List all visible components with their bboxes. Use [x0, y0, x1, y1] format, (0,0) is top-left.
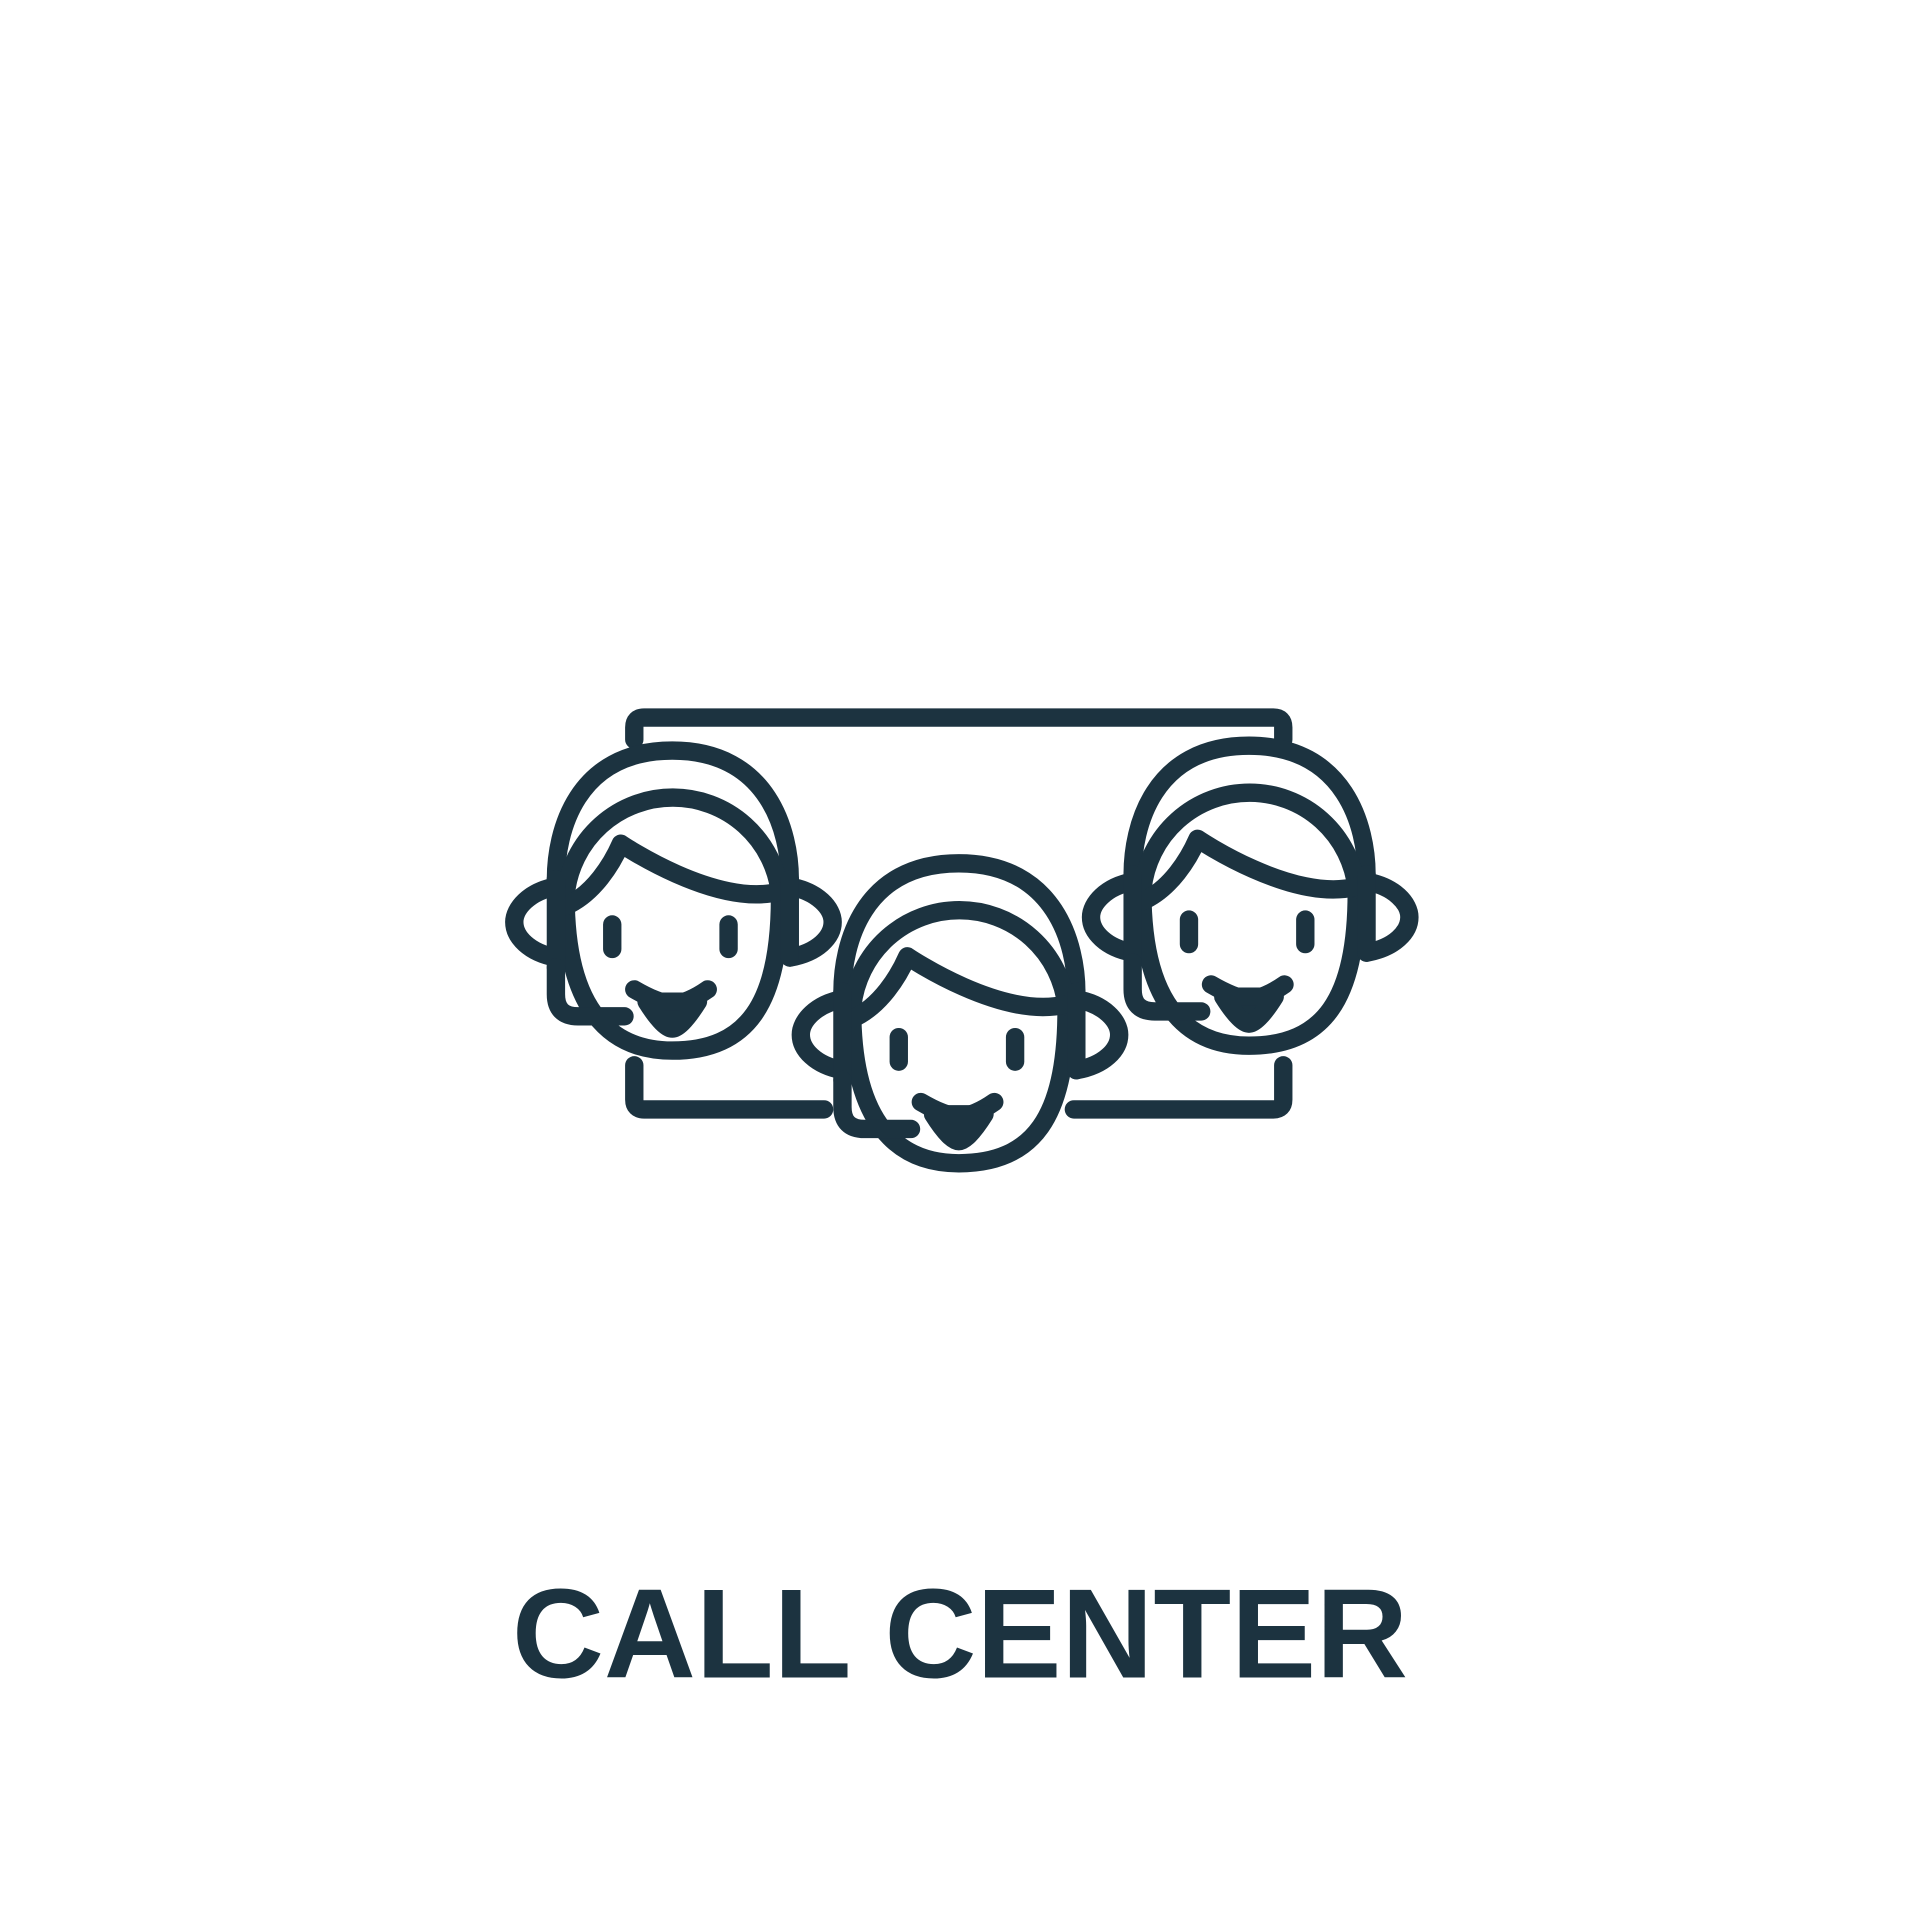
agent head: center	[801, 863, 1119, 1163]
agent head: right	[1091, 746, 1409, 1046]
connecting frame	[634, 718, 1283, 1109]
title: CALL CENTER	[512, 1563, 1408, 1705]
agent head: left	[514, 751, 833, 1051]
icon: call center team	[514, 718, 1409, 1163]
